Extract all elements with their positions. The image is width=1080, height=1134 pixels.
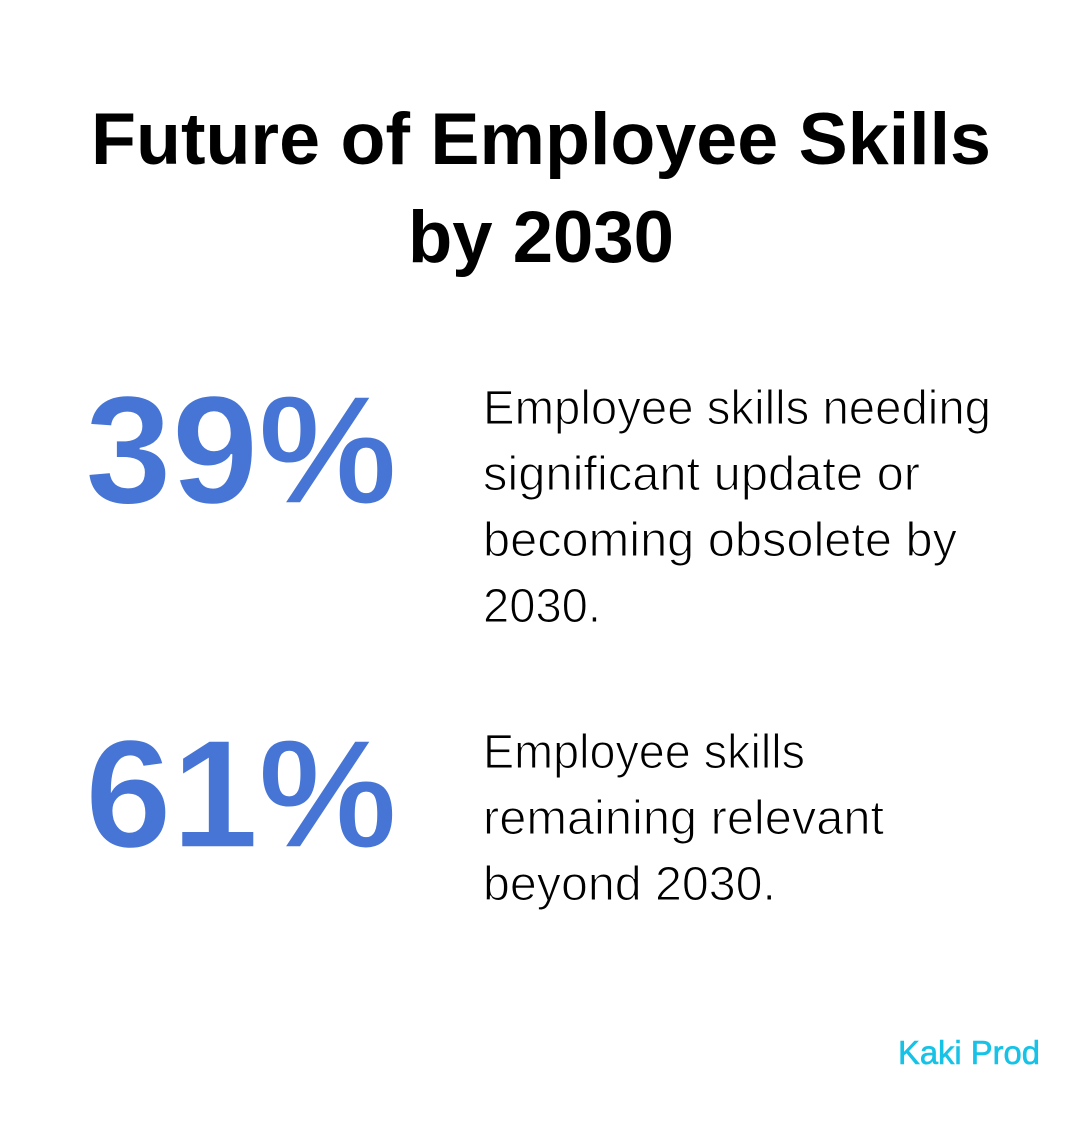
text block: 39% description: significant update or bbox=[483, 448, 920, 501]
stat: 61%: 61% bbox=[85, 708, 397, 880]
text block: 39% description: Employee skills needing bbox=[483, 382, 991, 435]
text block: 39% description bbox=[483, 382, 991, 633]
text block: 39% description: becoming obsolete by bbox=[483, 514, 957, 567]
stat: 39%: 39% bbox=[85, 364, 397, 536]
title: Future of Employee Skills bbox=[91, 99, 991, 180]
text block: 39% description: 2030. bbox=[483, 580, 601, 633]
text block: 61% description: beyond 2030. bbox=[483, 858, 776, 911]
title bbox=[91, 99, 991, 278]
text block: 61% description: Employee skills bbox=[483, 726, 805, 779]
title: by 2030 bbox=[408, 197, 674, 278]
text block: 61% description: remaining relevant bbox=[483, 792, 884, 845]
text block: 61% description bbox=[483, 726, 884, 911]
logo: Kaki Prod: Kaki Prod bbox=[898, 1034, 1040, 1071]
